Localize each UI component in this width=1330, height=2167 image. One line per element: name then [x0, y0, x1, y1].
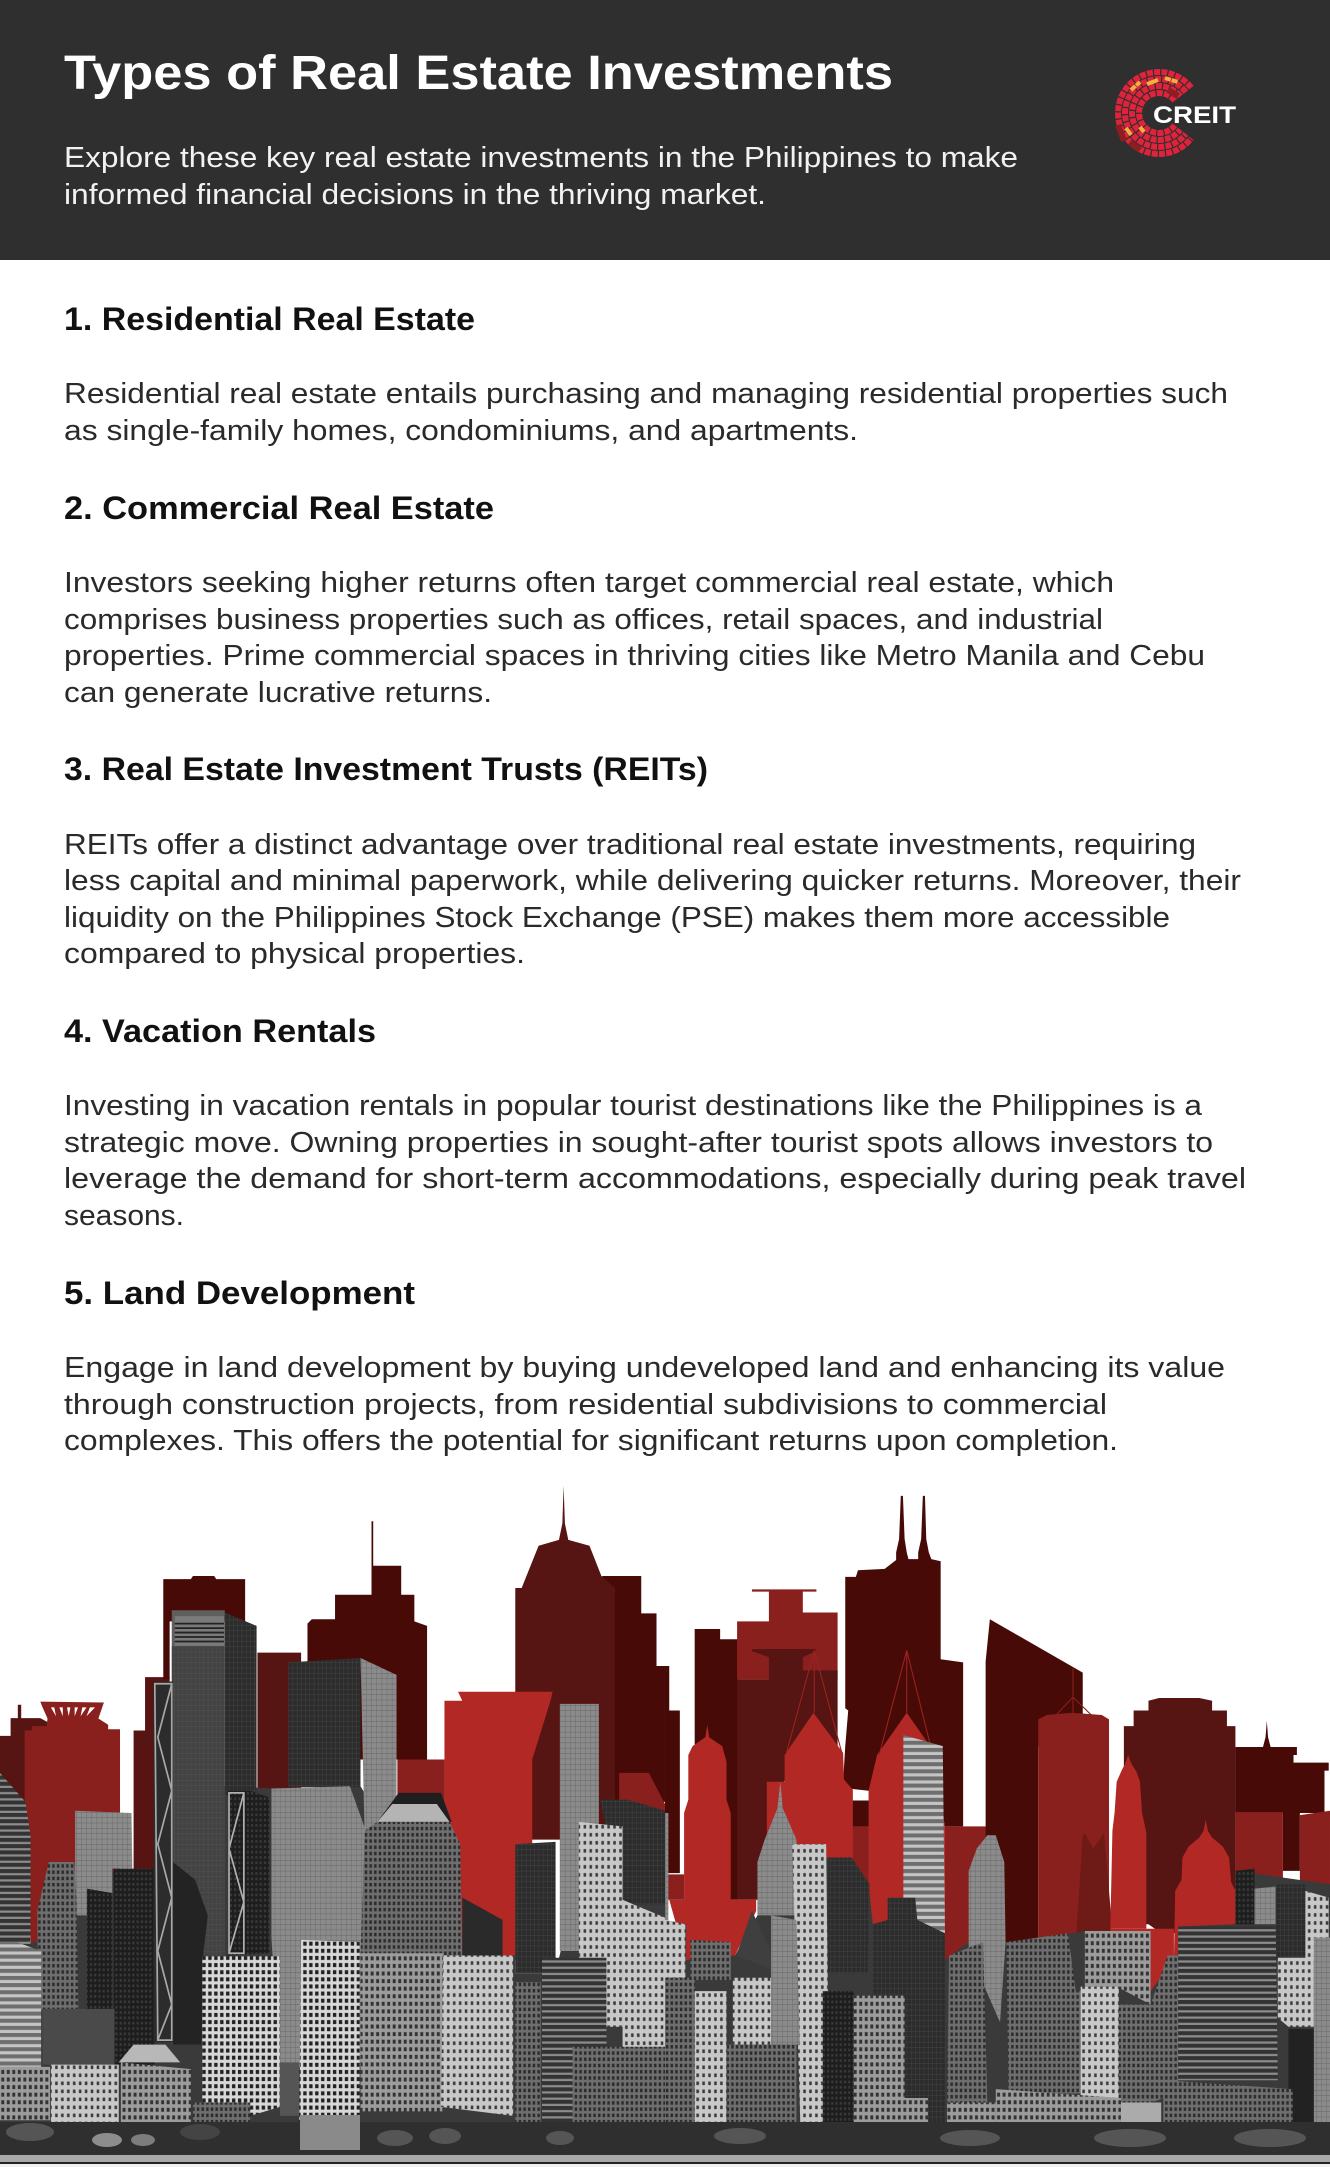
section 3: REITs: less capital and minimal paperwork, while delivering quicker returns. Moreover, their [64, 865, 1241, 897]
red silhouettes: left half [0, 1486, 665, 1960]
section 4: vacation rentals: leverage the demand for short-term accommodations, especially during peak travel [64, 1163, 1246, 1195]
section 1: residential real estate: Residential real estate entails purchasing and managing residential properties such [64, 378, 1228, 410]
section 1: residential real estate: 1. Residential Real Estate [64, 301, 475, 337]
section 4: vacation rentals [64, 1013, 1246, 1232]
section 3: REITs: REITs offer a distinct advantage over traditional real estate investments, requiring [64, 829, 1196, 861]
grayscale buildings: right half [665, 1735, 1330, 2167]
grayscale buildings: left half [0, 1610, 665, 2167]
section 5: land development: through construction projects, from residential subdivisions to commercial [64, 1389, 1107, 1421]
section 4: vacation rentals: 4. Vacation Rentals [64, 1013, 376, 1049]
section 2: commercial real estate: 2. Commercial Real Estate [64, 490, 494, 526]
red silhouettes: right half [665, 1496, 1330, 1991]
section 3: REITs [64, 751, 1241, 970]
section 2: commercial real estate: properties. Prime commercial spaces in thriving cities like Metro Manila and Cebu [64, 640, 1205, 672]
section 5: land development: complexes. This offers the potential for significant returns upon completion. [64, 1425, 1118, 1457]
section 4: vacation rentals: seasons. [64, 1200, 184, 1232]
section 5: land development: 5. Land Development [64, 1275, 415, 1311]
intro text: informed financial decisions in the thriving market. [64, 179, 766, 211]
section 1: residential real estate [64, 301, 1228, 447]
section 2: commercial real estate: Investors seeking higher returns often target commercial real estate, which [64, 567, 1114, 599]
section 3: REITs: compared to physical properties. [64, 938, 525, 970]
section 5: land development: Engage in land development by buying undeveloped land and enhancing its value [64, 1352, 1225, 1384]
intro text: Explore these key real estate investments in the Philippines to make [64, 142, 1018, 174]
section 3: REITs: 3. Real Estate Investment Trusts (REITs) [64, 751, 708, 787]
skyline illustration [0, 1486, 1330, 2167]
section 2: commercial real estate: can generate lucrative returns. [64, 677, 492, 709]
section 2: commercial real estate: comprises business properties such as offices, retail spaces, and industrial [64, 604, 1103, 636]
title: Types of Real Estate Investments [64, 47, 893, 100]
section 2: commercial real estate [64, 490, 1205, 709]
trees and shoreline [0, 2115, 1330, 2167]
logo: CREIT [1118, 72, 1236, 154]
section 5: land development [64, 1275, 1225, 1457]
section 1: residential real estate: as single-family homes, condominiums, and apartments. [64, 415, 858, 447]
logo: CREIT: CREIT [1153, 102, 1236, 129]
header panel [0, 0, 1330, 260]
section 4: vacation rentals: Investing in vacation rentals in popular tourist destinations like the Philippines is a [64, 1090, 1203, 1122]
section 3: REITs: liquidity on the Philippines Stock Exchange (PSE) makes them more accessible [64, 902, 1170, 934]
section 4: vacation rentals: strategic move. Owning properties in sought-after tourist spots allows investors to [64, 1127, 1213, 1159]
intro text [64, 142, 1018, 211]
